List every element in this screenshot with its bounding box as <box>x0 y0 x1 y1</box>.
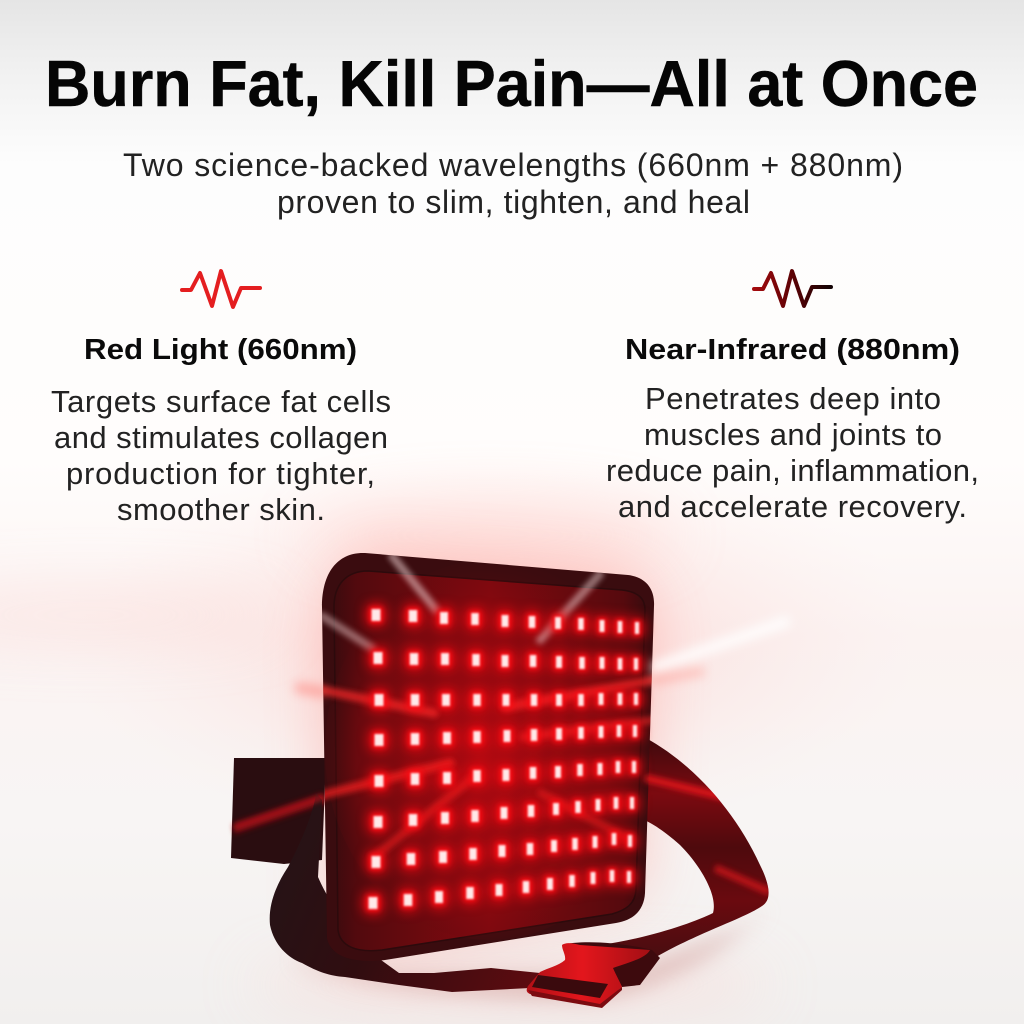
text: near-infrared description: muscles and joints to <box>644 417 942 452</box>
panel shadow edge <box>322 553 654 961</box>
strap right <box>600 735 769 975</box>
buckle <box>527 942 660 1008</box>
subtitle: Two science-backed wavelengths (660nm + 880nm) <box>123 147 903 183</box>
column: red light <box>51 334 391 527</box>
panel face <box>322 556 655 951</box>
text: near-infrared description: reduce pain, inflammation, <box>606 453 979 488</box>
subtitle: proven to slim, tighten, and heal <box>277 184 750 220</box>
icon: red light wave <box>182 271 260 307</box>
product: red light therapy belt <box>231 553 785 1008</box>
strap left sweep <box>270 793 540 992</box>
text: red light description: smoother skin. <box>117 492 325 527</box>
title: Burn Fat, Kill Pain—All at Once <box>45 47 978 120</box>
text: red light description: and stimulates collagen <box>54 420 388 455</box>
back strap left <box>231 758 326 864</box>
light rays on panel <box>322 556 654 857</box>
heading: near-infrared: Near-Infrared (880nm) <box>625 334 960 366</box>
LED grid <box>373 609 637 909</box>
heading: red light: Red Light (660nm) <box>84 334 357 366</box>
icon: near-infrared wave <box>754 271 831 306</box>
light rays beyond panel <box>236 622 785 826</box>
glow on right strap <box>645 778 770 892</box>
text: red light description <box>51 384 391 527</box>
text: near-infrared description: Penetrates deep into <box>645 381 941 416</box>
floor shadow <box>290 905 770 1000</box>
text: red light description: production for tighter, <box>66 456 375 491</box>
column: near-infrared <box>606 334 979 524</box>
text: near-infrared description <box>606 381 979 524</box>
text: near-infrared description: and accelerate recovery. <box>618 489 967 524</box>
subtitle <box>123 147 903 220</box>
text: red light description: Targets surface fat cells <box>51 384 391 419</box>
